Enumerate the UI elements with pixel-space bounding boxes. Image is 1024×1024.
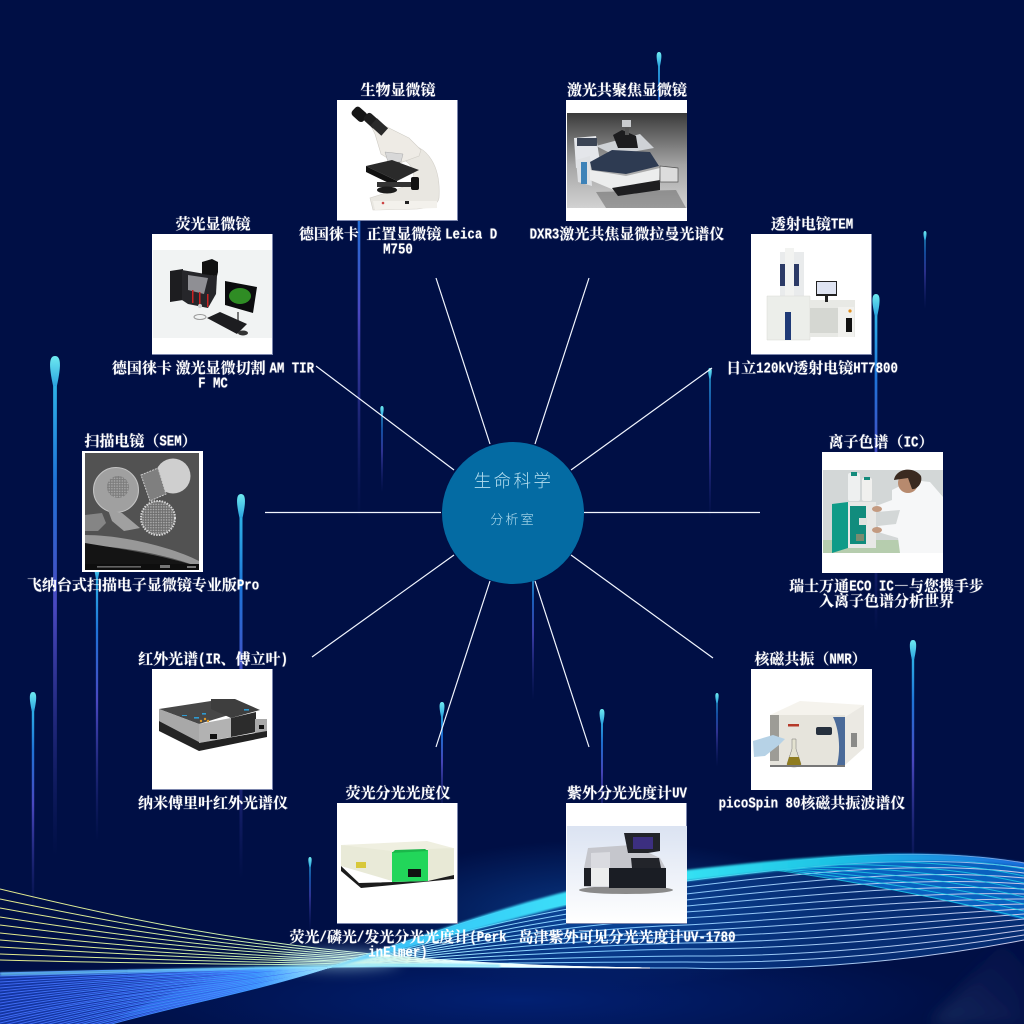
central hub: 生命科学 分析室 bbox=[442, 442, 584, 584]
image: fluorescence spectrophotometer bbox=[337, 803, 458, 924]
panel: 激光共聚焦显微镜: 激光共焦显微拉曼光谱仪 bbox=[559, 223, 724, 244]
panel: 扫描电镜（SEM）: SEM bbox=[159, 434, 182, 451]
image: DXR3 confocal Raman bbox=[566, 100, 687, 221]
panel: 扫描电镜（SEM） bbox=[27, 430, 260, 595]
panel: 荧光分光光度仪: / bbox=[357, 930, 364, 947]
panel: 扫描电镜（SEM）: Pro bbox=[237, 578, 259, 595]
panel: 离子色谱（IC）: 瑞士万通 —与您携手步 bbox=[789, 575, 984, 596]
panel: 红外光谱: 纳米傅里叶红外光谱仪 bbox=[138, 792, 288, 813]
panel: 荧光显微镜: 荧光显微镜 bbox=[175, 213, 250, 234]
image: upright microscope bbox=[337, 100, 458, 221]
panel: 荧光分光光度仪: (Perk bbox=[469, 930, 507, 947]
panel: 生物显微镜: 德国徕卡 正置显微镜 bbox=[299, 223, 441, 244]
panel: 离子色谱（IC）: ECO IC bbox=[849, 579, 894, 596]
panel: 透射电镜TEM: 日立 透射电镜 bbox=[726, 357, 853, 378]
panel: 透射电镜TEM: HT7800 bbox=[853, 361, 898, 378]
panel: 透射电镜TEM bbox=[726, 213, 898, 378]
panel: 透射电镜TEM: TEM bbox=[831, 217, 853, 234]
panel: 荧光显微镜: F MC bbox=[198, 376, 228, 393]
central hub: 生命科学 分析室: 分析室 bbox=[490, 508, 536, 528]
panel: 荧光分光光度仪 bbox=[289, 782, 507, 962]
panel: 核磁共振（NMR）: NMR bbox=[829, 652, 852, 669]
panel: 生物显微镜 bbox=[299, 79, 498, 259]
panel: 紫外分光光度计UV bbox=[518, 782, 736, 947]
image: Hitachi HT7800 TEM bbox=[751, 234, 872, 355]
panel: 荧光显微镜: 德国徕卡 激光显微切割 bbox=[112, 357, 266, 378]
panel: 红外光谱: 红外光谱 、傅立叶 bbox=[138, 648, 280, 669]
panel: 核磁共振（NMR）: 核磁共振波谱仪 bbox=[800, 792, 905, 813]
panel: 荧光分光光度仪: 荧光 磷光 发光分光光度计 bbox=[289, 926, 469, 947]
panel: 扫描电镜（SEM）: 扫描电镜（ ） bbox=[84, 430, 197, 451]
panel: 红外光谱: ) bbox=[280, 652, 288, 669]
panel: 激光共聚焦显微镜: 激光共聚焦显微镜 bbox=[567, 79, 687, 100]
image: technician using ion chromatograph bbox=[822, 452, 943, 573]
panel: 激光共聚焦显微镜: DXR3 bbox=[530, 227, 559, 244]
panel: 核磁共振（NMR）: picoSpin 80 bbox=[719, 796, 800, 813]
panel: 紫外分光光度计UV: UV bbox=[672, 786, 687, 803]
wave mesh bbox=[0, 854, 1024, 1024]
panel: 荧光显微镜 bbox=[112, 213, 314, 393]
image: FTIR spectrometer bbox=[152, 669, 273, 790]
panel: 扫描电镜（SEM）: 飞纳台式扫描电子显微镜专业版 bbox=[27, 574, 237, 595]
panel: 荧光分光光度仪: / bbox=[319, 930, 327, 947]
panel: 荧光分光光度仪: 荧光分光光度仪 bbox=[345, 782, 450, 803]
panel: 核磁共振（NMR） bbox=[718, 648, 906, 813]
panel: 离子色谱（IC）: IC bbox=[904, 435, 918, 452]
lower-left fan lines bbox=[0, 967, 327, 1024]
panel: 生物显微镜: 生物显微镜 bbox=[360, 79, 436, 100]
panel: 荧光分光光度仪: inElmer) bbox=[368, 945, 428, 962]
panel: 激光共聚焦显微镜 bbox=[530, 79, 724, 244]
spokes radiating from the hub bbox=[265, 278, 760, 747]
panel: 透射电镜TEM: 120kV bbox=[756, 361, 793, 378]
image: SEM micrograph of diatoms bbox=[82, 451, 203, 572]
panel: 透射电镜TEM: 透射电镜 bbox=[771, 213, 831, 234]
panel: 生物显微镜: Leica D bbox=[445, 227, 497, 244]
panel: 紫外分光光度计UV: 岛津紫外可见分光光度计 bbox=[518, 926, 683, 947]
panel: 生物显微镜: M750 bbox=[383, 242, 413, 259]
panel: 紫外分光光度计UV: 紫外分光光度计 bbox=[567, 782, 672, 803]
panel: 荧光显微镜: AM TIR bbox=[269, 361, 314, 378]
panel: 核磁共振（NMR）: 核磁共振（ ） bbox=[754, 648, 867, 669]
panel: 离子色谱（IC） bbox=[789, 431, 984, 611]
panel: 紫外分光光度计UV: UV-1780 bbox=[683, 930, 736, 947]
image: Shimadzu UV-1780 bbox=[566, 803, 687, 924]
central hub: 生命科学 分析室: 生命科学 bbox=[474, 468, 553, 492]
upper-right cyan cross mesh bbox=[760, 858, 1024, 918]
panel: 离子色谱（IC）: 离子色谱（ ） bbox=[829, 431, 933, 452]
panel: 红外光谱: (IR bbox=[198, 652, 220, 669]
image: picoSpin 80 NMR bbox=[751, 669, 872, 790]
light droplet lines bbox=[30, 52, 927, 930]
image: laser microdissection system bbox=[152, 234, 273, 355]
panel: 红外光谱 bbox=[138, 648, 288, 813]
panel: 离子色谱（IC）: 入离子色谱分析世界 bbox=[819, 590, 954, 611]
